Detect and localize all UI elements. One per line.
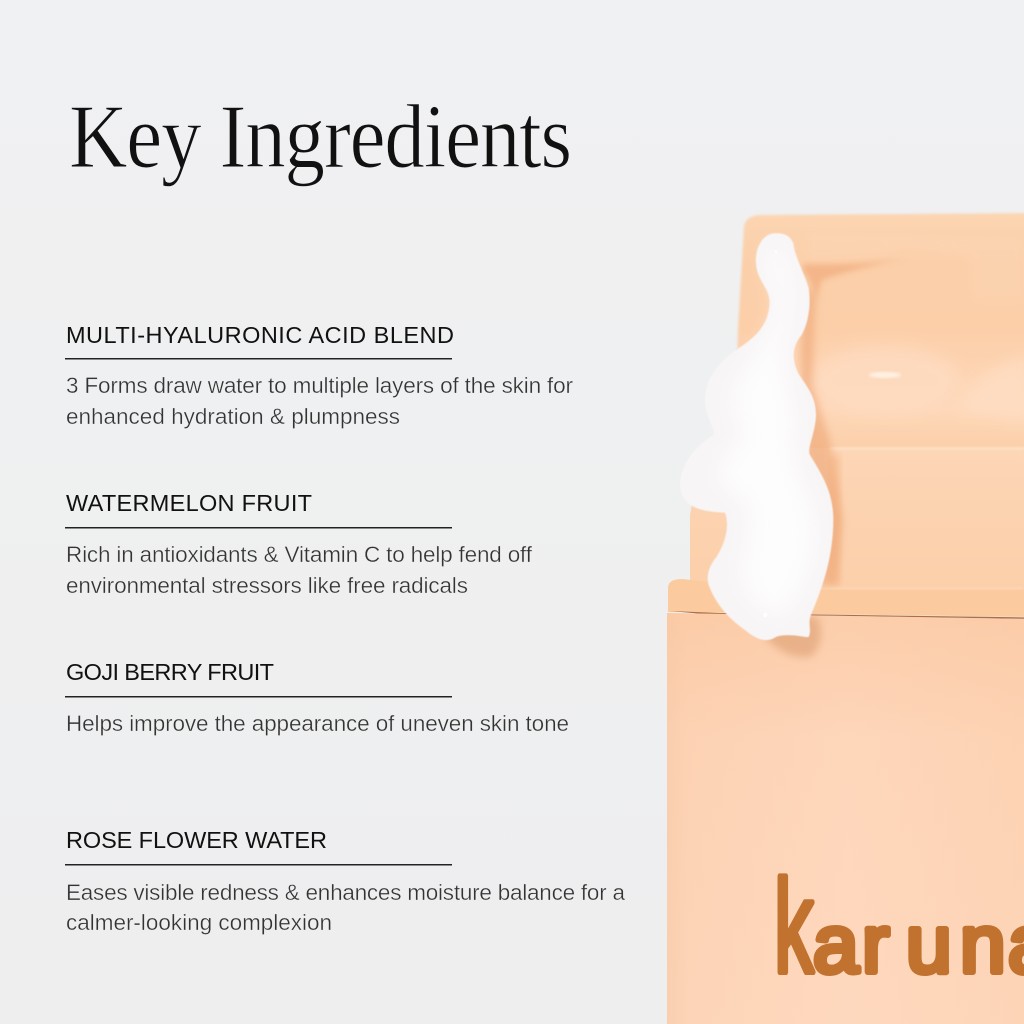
ingredient: goji berry fruit: Helps improve the appearance of uneven skin tone (66, 711, 569, 736)
bottle ring (668, 579, 1024, 619)
bottle middle section (690, 447, 1024, 590)
ingredient: watermelon fruit: WATERMELON FRUIT (66, 490, 312, 516)
bottle body (667, 613, 1024, 1024)
ingredient: multi-hyaluronic acid blend: 3 Forms draw water to multiple layers of the skin for (66, 373, 574, 398)
ingredient: rose flower water: ROSE FLOWER WATER (66, 827, 327, 853)
bottle top section (735, 213, 1024, 450)
product: bottle with cream (667, 213, 1024, 1024)
ingredient: multi-hyaluronic acid blend: MULTI-HYALURONIC ACID BLEND (66, 322, 454, 348)
ingredient: watermelon fruit (65, 490, 533, 598)
ingredient: rose flower water: Eases visible redness & enhances moisture balance for a (66, 880, 625, 905)
ingredient: rose flower water: calmer-looking complexion (66, 910, 332, 935)
brand name on bottle (774, 853, 1024, 1001)
ingredient: rose flower water (65, 827, 625, 935)
title: Key Ingredients (69, 86, 572, 187)
ingredient: multi-hyaluronic acid blend (65, 322, 574, 429)
cream shadow (765, 610, 821, 657)
cream dollop (680, 233, 833, 640)
ingredient: goji berry fruit (65, 659, 569, 736)
shadow beside cream (800, 285, 843, 585)
brand name on bottle: k (774, 853, 814, 1001)
ingredient: goji berry fruit: GOJI BERRY FRUIT (66, 659, 274, 685)
ingredient: watermelon fruit: Rich in antioxidants & Vitamin C to help fend off (66, 542, 533, 567)
ingredient: watermelon fruit: environmental stressors like free radicals (66, 573, 468, 598)
ingredient: multi-hyaluronic acid blend: enhanced hydration & plumpness (66, 404, 400, 429)
